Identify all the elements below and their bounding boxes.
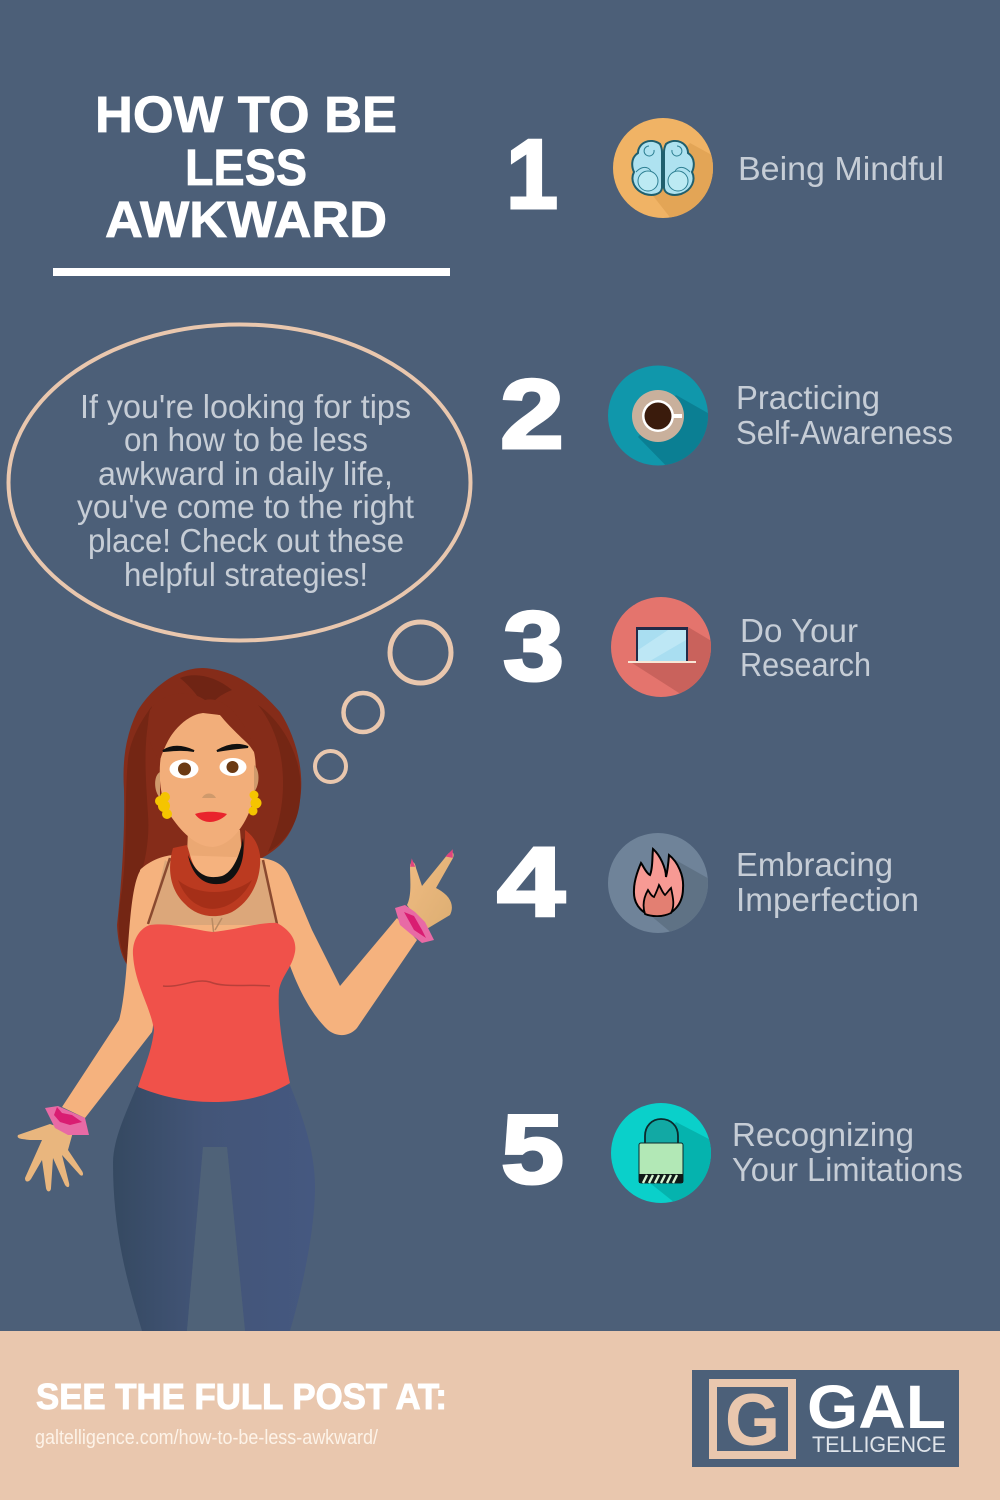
hair parting: [148, 693, 256, 760]
eyebrows: [163, 745, 248, 751]
nose: [202, 794, 216, 798]
logo: TELLIGENCE: [812, 1432, 946, 1457]
face: [160, 713, 256, 847]
step 5 label: Your Limitations: [732, 1151, 963, 1188]
pants: [113, 1085, 315, 1331]
step 1 icon: brain: [613, 118, 713, 218]
top fold: [163, 981, 270, 986]
scarf: [170, 830, 260, 916]
straps: [148, 858, 277, 924]
bubble text: place! Check out these: [88, 522, 404, 559]
lips: [195, 812, 227, 822]
step 3 label: Research: [740, 646, 871, 683]
bubble text: awkward in daily life,: [98, 455, 393, 492]
right scrunchie: [395, 905, 434, 943]
footer band: [0, 1331, 1000, 1500]
bubble text: you've come to the right: [77, 488, 414, 525]
neck: [186, 830, 244, 900]
title: LESS: [185, 139, 307, 196]
title: HOW TO BE: [95, 86, 397, 143]
thought bubble: [8, 324, 470, 782]
logo: GAL: [807, 1373, 946, 1441]
step 3 label: Do Your: [740, 612, 858, 649]
bubble text: on how to be less: [124, 421, 368, 458]
right hand: [407, 852, 454, 930]
ears: [155, 765, 258, 798]
red top: [133, 923, 295, 1102]
bubble text: helpful strategies!: [124, 556, 368, 593]
earrings: [155, 790, 262, 819]
step 5 number: 5: [501, 1094, 564, 1204]
footer url: galtelligence.com/how-to-be-less-awkward/: [35, 1427, 378, 1449]
step 3 number: 3: [503, 591, 564, 701]
step 4 label: Embracing: [736, 846, 893, 883]
step 1 number: 1: [506, 119, 558, 229]
step 2 icon: coffee: [608, 366, 708, 466]
title: [95, 86, 397, 248]
step 3 icon: laptop: [611, 597, 711, 697]
left arm: [62, 868, 160, 1118]
left hand: [18, 1124, 83, 1191]
torso skin: [140, 855, 417, 1035]
step 5 label: Recognizing: [732, 1116, 914, 1153]
logo: G: [725, 1380, 780, 1461]
pendant: [212, 918, 222, 945]
hair crown: [180, 675, 232, 712]
step 4 label: Imperfection: [736, 881, 919, 918]
hair shading: [119, 705, 301, 966]
step 2 number: 2: [500, 359, 564, 469]
step 3 label: [740, 612, 871, 683]
step 5 icon: padlock: [611, 1103, 711, 1203]
step 5 label: [732, 1116, 963, 1188]
gap between legs: [187, 1147, 245, 1331]
bubble text: [77, 388, 414, 593]
step 4 icon: flame: [608, 833, 708, 933]
bubble text: If you're looking for tips: [80, 388, 411, 425]
step 2 label: [736, 379, 953, 451]
title: AWKWARD: [105, 191, 387, 248]
step 1 label: Being Mindful: [738, 150, 944, 187]
logo: [692, 1370, 959, 1467]
back hair: [117, 668, 301, 966]
left scrunchie: [45, 1106, 89, 1135]
chest shade: [150, 860, 277, 925]
woman illustration: [18, 668, 454, 1331]
eyes: [170, 760, 198, 778]
step 4 label: [736, 846, 919, 918]
title underline: [53, 268, 450, 276]
step 2 label: Self-Awareness: [736, 414, 953, 451]
scarf shadow: [188, 838, 244, 884]
step 2 label: Practicing: [736, 379, 880, 416]
step 4 number: 4: [497, 827, 565, 937]
footer heading: SEE THE FULL POST AT:: [36, 1376, 447, 1417]
